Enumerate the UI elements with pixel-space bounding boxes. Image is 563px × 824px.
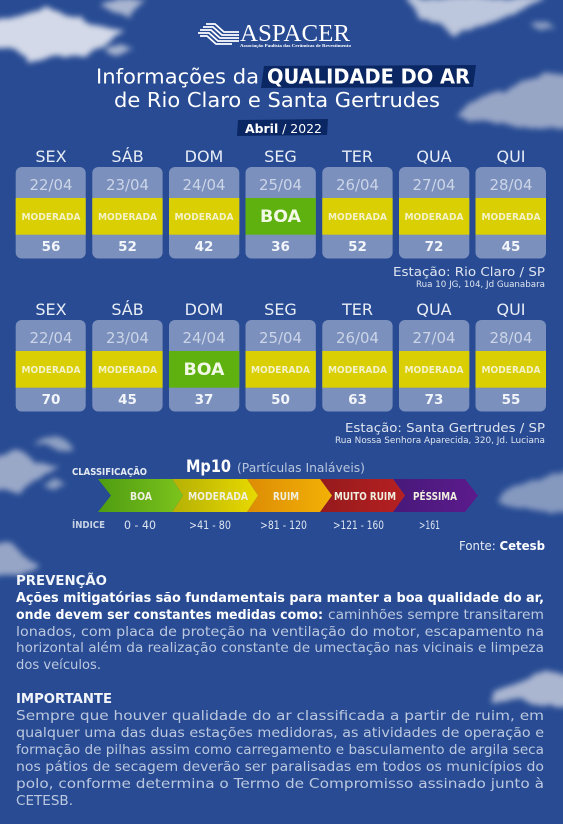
card: QUA 27/04: 27/04 — [412, 176, 456, 194]
card: QUI 28/04: 55 — [502, 392, 520, 408]
card: SEG 25/04: 25/04 — [259, 176, 302, 194]
card: DOM 24/04: BOA — [184, 360, 225, 380]
index values: 0 - 40 — [124, 518, 156, 532]
card: DOM 24/04: DOM — [185, 300, 223, 319]
card: SEX 22/04: MODERADA — [22, 365, 81, 376]
text block: importante — [16, 691, 544, 809]
card: SEG 25/04: MODERADA — [251, 365, 311, 376]
card: QUI 28/04: MODERADA — [482, 365, 541, 376]
card: QUA 27/04: QUA — [416, 300, 452, 319]
card: SÁB 23/04: SÁB — [111, 300, 144, 319]
card: QUI 28/04: 28/04 — [490, 329, 532, 347]
title emphasis: QUALIDADE DO AR — [267, 64, 470, 88]
heading: prevenção: PREVENÇÃO — [16, 572, 107, 589]
card: SEX 22/04: SEX — [35, 147, 67, 166]
important paragraph: CETESB. — [16, 793, 73, 809]
card: SÁB 23/04 — [92, 147, 163, 258]
card: QUA 27/04: MODERADA — [404, 212, 464, 223]
card: QUA 27/04: 73 — [425, 392, 443, 408]
title line 2: de Rio Claro e Santa Gertrudes — [114, 88, 440, 112]
card: SEG 25/04: 25/04 — [259, 329, 302, 347]
chevron: muito ruim — [320, 479, 405, 512]
important paragraph: nos pátios de secagem deverão ser paralisadas em todos os municípios do — [16, 759, 544, 775]
prevention paragraph — [16, 590, 544, 673]
prevention paragraph: lonados, com placa de proteção na ventilação do motor, escapamento na — [16, 624, 544, 640]
card: SEX 22/04: MODERADA — [22, 212, 81, 223]
station: Santa Gertrudes: Estação: Santa Gertrudes / SP — [345, 420, 545, 435]
card: QUI 28/04: QUI — [496, 147, 526, 166]
card: SEX 22/04: 22/04 — [30, 329, 72, 347]
card: SEX 22/04 — [16, 147, 86, 258]
card: TER 26/04 — [322, 300, 393, 412]
card: QUI 28/04: 45 — [502, 239, 520, 255]
prevention paragraph: horizontal além da realização constante de umectação nas vicinais e limpeza — [16, 640, 544, 656]
card: TER 26/04: TER — [341, 300, 373, 319]
card: TER 26/04: 63 — [348, 392, 367, 408]
logo: ASPACER — [198, 21, 352, 48]
card: SEG 25/04: BOA — [260, 207, 302, 227]
card: SÁB 23/04: 23/04 — [106, 176, 149, 194]
chevron: ruim: RUIM — [273, 491, 299, 503]
card: QUI 28/04 — [476, 147, 546, 258]
card: SÁB 23/04: 23/04 — [106, 329, 149, 347]
card: TER 26/04: 52 — [348, 239, 367, 255]
card: QUA 27/04: QUA — [416, 147, 452, 166]
panel: Santa Gertrudes week — [16, 300, 546, 412]
card: SEG 25/04: SEG — [264, 300, 297, 319]
card: QUA 27/04: MODERADA — [404, 365, 464, 376]
important paragraph: formação de pilhas assim como carregamento e basculamento de argila seca — [16, 742, 544, 758]
classification scale — [72, 457, 545, 553]
logo tagline: Associação Paulista das Cerâmicas de Revestimento — [240, 43, 352, 48]
scale heading: Mp10: Mp10 — [186, 457, 231, 477]
card: SEG 25/04: 36 — [271, 239, 290, 255]
card: SÁB 23/04: MODERADA — [98, 212, 158, 223]
card: DOM 24/04: DOM — [185, 147, 223, 166]
card: TER 26/04: MODERADA — [328, 212, 388, 223]
card: DOM 24/04: 24/04 — [182, 329, 226, 347]
date badge: Abril / 2022 — [245, 121, 322, 136]
heading: importante: IMPORTANTE — [16, 691, 112, 707]
card: SÁB 23/04 — [92, 300, 163, 412]
card: SEG 25/04 — [246, 147, 316, 258]
card: DOM 24/04 — [169, 300, 239, 412]
card: QUA 27/04 — [399, 300, 469, 412]
card: QUI 28/04: MODERADA — [482, 212, 541, 223]
card: TER 26/04: TER — [341, 147, 373, 166]
prevention paragraph: Ações mitigatórias são fundamentais para manter a boa qualidade do ar, — [16, 590, 544, 606]
icon: logo stripes — [198, 24, 239, 44]
card: QUI 28/04 — [476, 300, 546, 412]
panel: Rio Claro week — [16, 147, 546, 258]
card: TER 26/04 — [322, 147, 393, 258]
card: DOM 24/04 — [169, 147, 239, 258]
prevention paragraph: dos veículos. — [16, 657, 101, 673]
index values: >41 - 80 — [189, 518, 231, 532]
chevron: moderada — [172, 479, 258, 512]
logo wordmark: ASPACER — [240, 21, 350, 47]
chevron: muito ruim: MUITO RUIM — [334, 491, 396, 503]
scale subheading: (Partículas Inaláveis) — [237, 460, 365, 475]
chevron: péssima — [393, 479, 478, 512]
index values — [124, 518, 440, 532]
card: SÁB 23/04: MODERADA — [98, 365, 158, 376]
card: SÁB 23/04: 45 — [118, 392, 137, 408]
prevention paragraph: onde devem ser constantes medidas como: — [16, 607, 323, 623]
card: SEG 25/04: 50 — [271, 392, 290, 408]
scale label: índice: ÍNDICE — [72, 518, 105, 531]
card: DOM 24/04: MODERADA — [174, 212, 234, 223]
chevron: ruim — [247, 479, 332, 512]
title highlight — [261, 65, 476, 88]
chevron: moderada: MODERADA — [188, 491, 249, 503]
important paragraph: Sempre que houver qualidade do ar classificada a partir de ruim, em — [16, 708, 544, 724]
index values: >161 — [419, 518, 440, 532]
card: TER 26/04: 26/04 — [336, 176, 379, 194]
card: DOM 24/04: 37 — [195, 392, 213, 408]
index values: >121 - 160 — [333, 518, 384, 532]
important paragraph — [16, 708, 544, 809]
card: QUI 28/04: 28/04 — [490, 176, 532, 194]
station: Santa Gertrudes — [335, 420, 545, 446]
card: DOM 24/04: 24/04 — [182, 176, 226, 194]
scale label: classificação: CLASSIFICAÇÃO — [72, 465, 147, 478]
card: SEG 25/04 — [246, 300, 316, 412]
text block: prevenção — [16, 572, 544, 673]
card: TER 26/04: MODERADA — [328, 365, 388, 376]
prevention paragraph: caminhões sempre transitarem — [328, 607, 544, 623]
card: SEX 22/04: 70 — [42, 392, 60, 408]
card: SÁB 23/04: 52 — [118, 239, 137, 255]
card: SEX 22/04 — [16, 300, 86, 412]
station: Santa Gertrudes: Rua Nossa Senhora Aparecida, 320, Jd. Luciana — [335, 436, 545, 446]
card: QUA 27/04 — [399, 147, 469, 258]
card: TER 26/04: 26/04 — [336, 329, 379, 347]
title — [96, 64, 476, 112]
card: SEX 22/04: 22/04 — [30, 176, 72, 194]
card: DOM 24/04: 42 — [195, 239, 213, 255]
station: Rio Claro: Rua 10 JG, 104, Jd Guanabara — [416, 280, 545, 290]
card: QUA 27/04: 72 — [425, 239, 443, 255]
card: SEX 22/04: SEX — [35, 300, 67, 319]
source: Fonte: Cetesb — [459, 539, 545, 553]
card: SÁB 23/04: SÁB — [111, 147, 144, 166]
chevron: boa — [98, 479, 183, 512]
chevron: péssima: PÉSSIMA — [413, 490, 458, 503]
card: QUI 28/04: QUI — [496, 300, 526, 319]
important paragraph: polo, conforme determina o Termo de Compromisso assinado junto à — [16, 776, 544, 792]
card: SEG 25/04: SEG — [264, 147, 297, 166]
card: QUA 27/04: 27/04 — [412, 329, 456, 347]
card: SEX 22/04: 56 — [42, 239, 60, 255]
important paragraph: qualquer uma das duas estações medidoras, as atividades de operação e — [16, 725, 544, 741]
station: Rio Claro: Estação: Rio Claro / SP — [393, 264, 545, 279]
title line 1: Informações da — [96, 64, 259, 88]
index values: >81 - 120 — [260, 518, 307, 532]
chevron: boa: BOA — [130, 491, 153, 503]
station: Rio Claro — [393, 264, 545, 290]
